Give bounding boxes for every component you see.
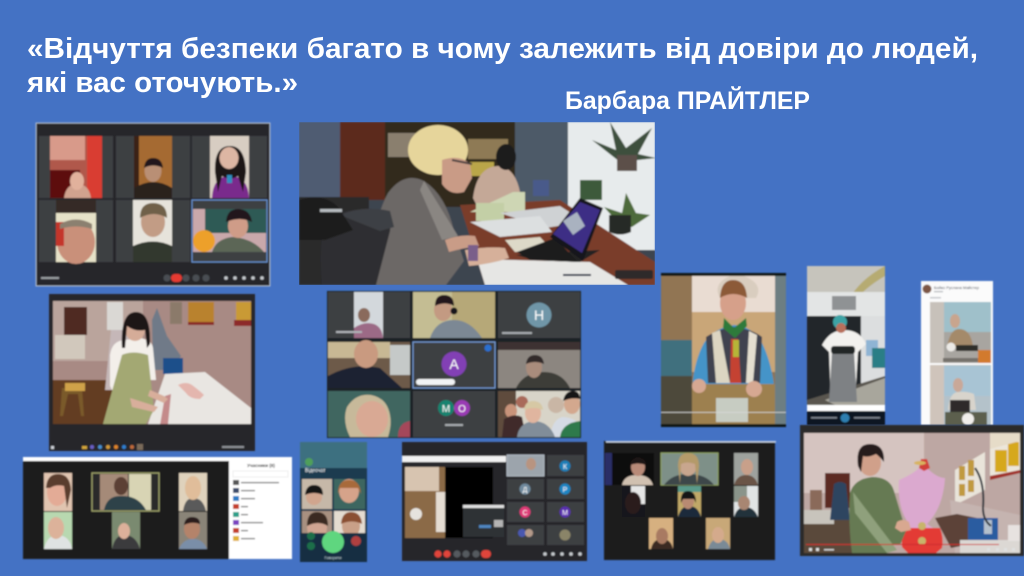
participant tiles: М bbox=[562, 510, 568, 517]
participant tiles: Р bbox=[563, 487, 568, 494]
title bbox=[26, 33, 978, 99]
student tile row two bbox=[622, 486, 758, 517]
teacher in grey jacket bbox=[373, 125, 509, 285]
panel: social media post with two videos bbox=[921, 281, 993, 425]
participant: girl in purple bbox=[210, 136, 249, 198]
call controls bbox=[434, 550, 582, 558]
student video tiles bbox=[44, 473, 207, 549]
windows taskbar bbox=[51, 444, 244, 450]
table and iron bbox=[935, 468, 1020, 553]
video progress bar and controls bbox=[806, 544, 1015, 551]
panel: seamstress with tailor's dummy bbox=[800, 425, 1024, 556]
participant tiles: К bbox=[563, 464, 568, 471]
wall posters bbox=[955, 433, 1020, 505]
office background: wall, cabinet, shelves, window bbox=[299, 122, 655, 285]
participant tile: woman with glasses bbox=[498, 342, 580, 388]
shared screen bbox=[402, 456, 506, 538]
participant tile: two avatars: М bbox=[442, 404, 450, 415]
participant: girl against red curtain bbox=[50, 136, 102, 198]
video thumbnail: woman at cooking table bbox=[930, 365, 991, 425]
student tile row three bbox=[649, 518, 730, 549]
video thumbnail: woman slicing vegetables bbox=[930, 302, 991, 363]
participant tile: avatar А: А bbox=[449, 356, 459, 372]
panel: phone video chat screenshot bbox=[300, 442, 367, 562]
participant tile: man with headset bbox=[430, 292, 495, 338]
tailor's dummy with pink blouse bbox=[899, 459, 945, 553]
participant tile: group of women bbox=[498, 391, 580, 437]
participant tile: two avatars: О bbox=[458, 404, 466, 415]
participant: young man in dark jacket bbox=[133, 200, 172, 262]
participants sidebar bbox=[233, 463, 288, 541]
participants sidebar: Учасники (8) bbox=[247, 463, 275, 468]
panel: video conference with eight students bbox=[604, 441, 776, 560]
panel: photo of teacher working at a laptop bbox=[299, 122, 656, 285]
participant tile: avatar Н: Н bbox=[534, 307, 544, 323]
panel: cook in apron bbox=[807, 266, 885, 425]
panel: phone video chat screenshot: Відеочат bbox=[305, 468, 326, 474]
teacher in green sweater bbox=[849, 444, 911, 553]
title: які вас оточують.» bbox=[26, 67, 298, 99]
participant tiles: С bbox=[522, 510, 528, 517]
participant: woman with yellow flowers bbox=[193, 209, 266, 252]
panel: video call screenshot with six participants bbox=[36, 123, 270, 286]
participant tile: avatar А bbox=[416, 344, 492, 385]
panel: video conference with six students and participants list bbox=[23, 457, 292, 559]
call controls bbox=[41, 274, 264, 282]
participant tile: blonde woman bbox=[345, 395, 410, 437]
desk with papers bbox=[460, 192, 655, 285]
participant: man close-up bbox=[56, 200, 96, 264]
quote author: Барбара ПРАЙТЛЕР bbox=[565, 85, 810, 115]
participant tile: avatar Н bbox=[502, 302, 552, 334]
participant: boy in warm room bbox=[134, 136, 172, 198]
student tile row one bbox=[605, 453, 758, 485]
participant tiles: Д bbox=[523, 487, 528, 494]
panel: seamstress demonstrating in a workshop bbox=[49, 294, 255, 451]
video tiles bbox=[302, 479, 365, 540]
panel: woman in scarf with blurred video edges bbox=[661, 273, 786, 427]
phone call controls: Говорити bbox=[325, 555, 341, 560]
panel: video call with nine participants bbox=[327, 291, 581, 438]
office chairs bbox=[299, 197, 394, 285]
panel: video call with shared screen bbox=[402, 442, 587, 561]
title: «Відчуття безпеки багато в чому залежить від довіри до людей, bbox=[27, 33, 978, 65]
participant tile: two avatars bbox=[438, 400, 470, 426]
laptop bbox=[516, 198, 603, 262]
plants on the window sill bbox=[580, 122, 656, 234]
participant tile: woman at window bbox=[336, 292, 383, 338]
participant tile: smiling man bbox=[328, 340, 410, 388]
panel: social media post with two videos: Бойко Руслана Майстер bbox=[934, 285, 980, 290]
participant tiles bbox=[507, 455, 584, 545]
colleague in background bbox=[473, 144, 549, 206]
